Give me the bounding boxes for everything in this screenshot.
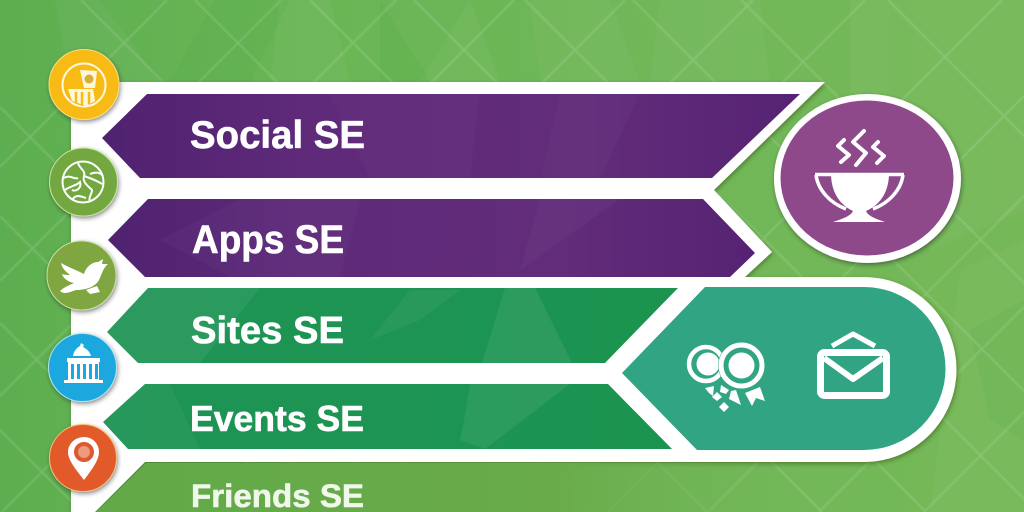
banner: Social SE: Social SE: [190, 114, 365, 157]
icon: envelope: [820, 334, 886, 396]
badge: green globe: [50, 148, 118, 216]
badge: blue building: [48, 334, 116, 402]
badge: orange location pin: [50, 424, 116, 492]
banner: Events SE: Events SE: [190, 398, 364, 439]
badge: green bird: [47, 241, 116, 310]
banner: Apps SE: [108, 199, 755, 277]
banner: Sites SE: [107, 288, 678, 363]
white frame: [71, 82, 957, 512]
banner: Events SE: [103, 384, 672, 449]
badge: medals and envelope: [622, 287, 946, 450]
badge: yellow food icon: [49, 50, 119, 120]
badge: trophy cup: [774, 94, 961, 263]
icon: steaming cup: [815, 131, 904, 222]
banner: Sites SE: Sites SE: [191, 310, 344, 352]
banner: Social SE: [102, 94, 800, 178]
banner: Friends SE: [96, 463, 800, 512]
icon: medals: [689, 342, 765, 412]
banner: Apps SE: Apps SE: [192, 218, 344, 262]
